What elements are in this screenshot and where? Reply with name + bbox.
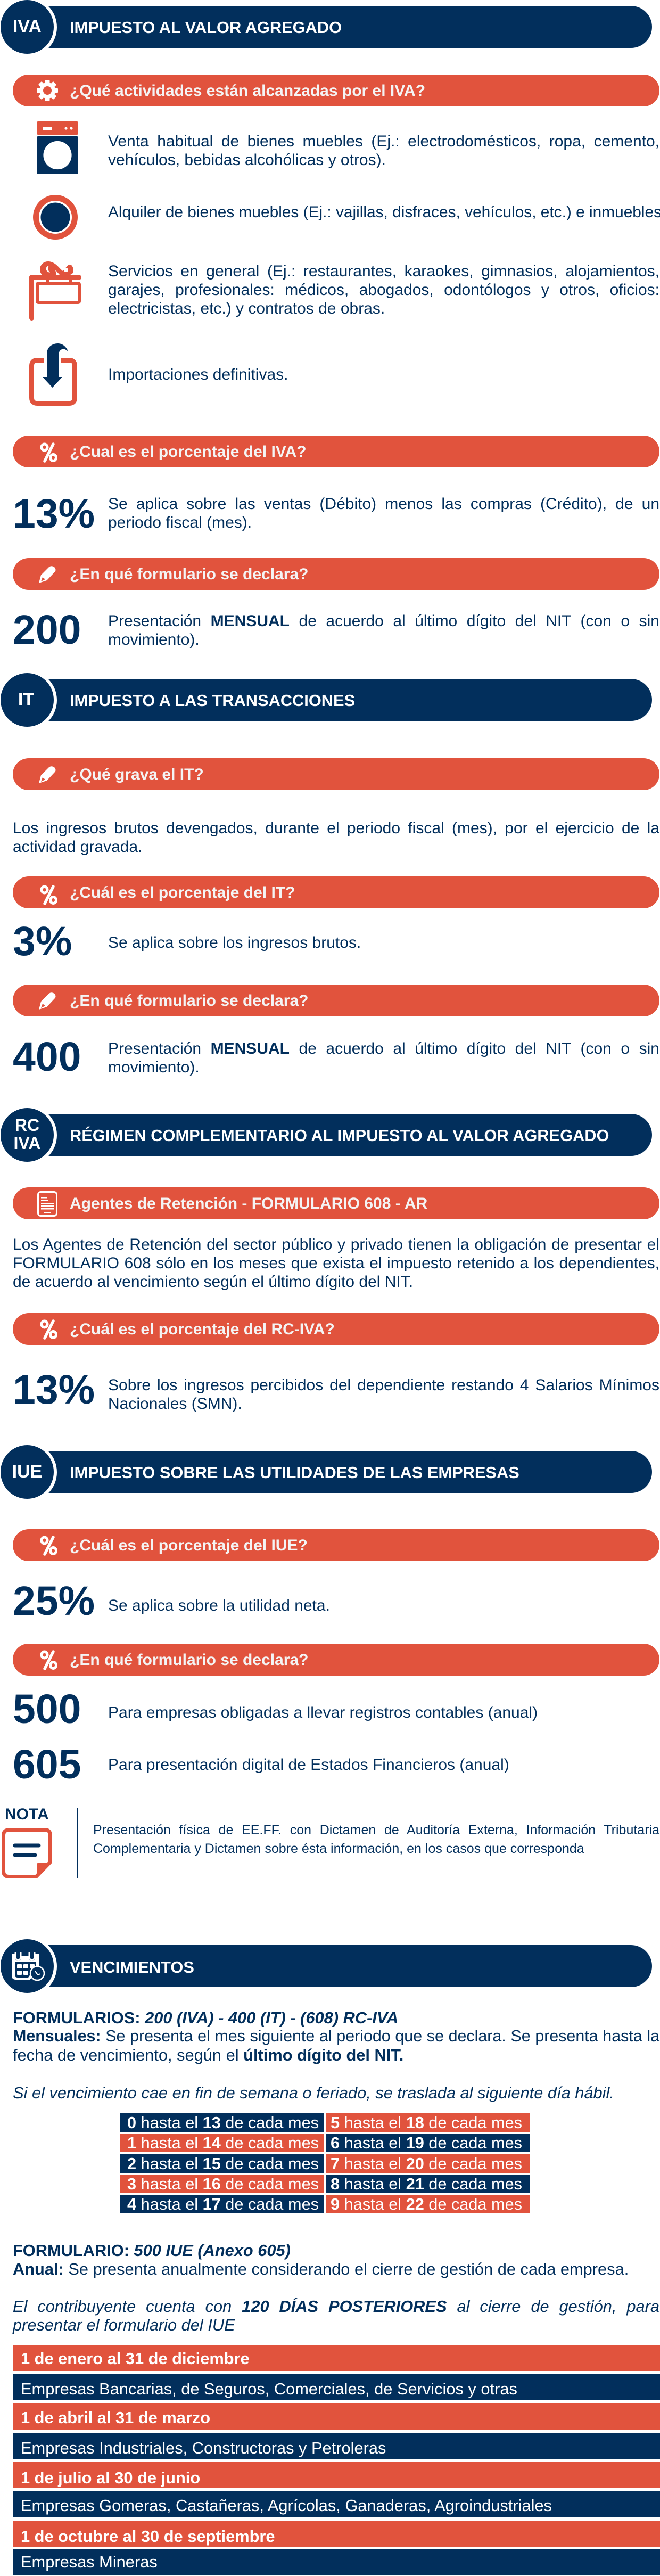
icon: import box with arrow (29, 343, 77, 406)
row 3 / 8 (120, 2175, 530, 2193)
icon: percent (40, 1536, 57, 1556)
text: formularios mensuales: FORMULARIOS: 200 (IVA) - 400 (IT) - (608) RC-IVA (13, 2008, 398, 2027)
subheader: que grava IT (13, 758, 659, 790)
text: nota: Presentación física de EE.FF. con Dictamen de Auditoría Externa, Información Tributaria (93, 1823, 659, 1837)
heading: Impuesto sobre utilidades: IMPUESTO SOBRE LAS UTILIDADES DE LAS EMPRESAS (70, 1463, 519, 1482)
icon: pencil (39, 992, 55, 1010)
number: 605: 605 (13, 1742, 81, 1787)
period 3 (13, 2462, 660, 2488)
subheader: porcentaje IUE (13, 1529, 659, 1561)
table: vencimiento por ultimo digito (120, 2113, 530, 2213)
label: formulario: ¿En qué formulario se declara? (70, 1651, 308, 1669)
number: 25%: 25% (13, 1578, 95, 1624)
text: agentes de retencion: de acuerdo al vencimiento según el último dígito del NIT. (13, 1273, 413, 1291)
label: que grava: ¿Qué grava el IT? (70, 766, 204, 783)
rows: cierre de gestion por sector (0, 2345, 660, 2576)
section header: IVA (1, 0, 652, 54)
period 3: 1 de julio al 30 de junio (21, 2468, 200, 2487)
row 4 / 9 (120, 2195, 530, 2213)
text: formularios mensuales (13, 2008, 660, 2064)
text: presentacion mensual: Presentación MENSUAL de acuerdo al último dígito del NIT (con o sin (108, 612, 659, 630)
row 1 / 6 (120, 2134, 530, 2152)
icon: document (37, 1191, 57, 1217)
period 4 (13, 2521, 660, 2547)
text: servicios: electricistas, etc.) y contratos de obras. (108, 300, 385, 317)
icon: percent (40, 885, 57, 905)
number: 3%: 3% (13, 918, 72, 964)
subheader: formulario IUE (13, 1644, 659, 1676)
section header: IUE (1, 1445, 652, 1499)
badge: IT: IT (18, 690, 34, 710)
label: porcentaje: ¿Cuál es el porcentaje del IT? (70, 884, 295, 901)
text: ingresos brutos (13, 819, 659, 856)
text: alquiler: Alquiler de bienes muebles (Ej.: vajillas, disfraces, vehículos, etc.) e inmuebles. (108, 203, 660, 221)
text: ingresos del dependiente (108, 1376, 659, 1413)
text: fin de semana: Si el vencimiento cae en fin de semana o feriado, se traslada al siguiente día hábil. (13, 2083, 614, 2102)
label: NOTA: NOTA (5, 1806, 49, 1823)
badge: IT (1, 673, 54, 727)
divider line (77, 1808, 78, 1878)
row 3 / 8: 8 hasta el 21 de cada mes (331, 2175, 522, 2193)
text: presentacion mensual: movimiento). (108, 1059, 200, 1076)
text: ventas menos compras (108, 495, 659, 531)
badge: IVA: IVA (13, 17, 42, 37)
text: ingresos del dependiente: Nacionales (SMN). (108, 1395, 242, 1413)
row 2 / 7: 7 hasta el 20 de cada mes (331, 2154, 522, 2173)
row 0 / 5 (120, 2113, 530, 2132)
icon: gear (37, 80, 58, 101)
sector 2 (13, 2433, 660, 2459)
icon: pencil (39, 766, 55, 783)
text: utilidad neta: Se aplica sobre la utilidad neta. (108, 1597, 330, 1614)
text: 120 dias: El contribuyente cuenta con 120 DÍAS POSTERIORES al cierre de gestión, para (13, 2297, 659, 2316)
subheader: porcentaje IT (13, 876, 659, 908)
period 2 (13, 2403, 660, 2430)
heading: Impuesto al valor agregado: IMPUESTO AL VALOR AGREGADO (70, 18, 342, 37)
section header: IT (1, 673, 652, 727)
row 4 / 9: 4 hasta el 17 de cada mes (127, 2195, 319, 2213)
text: ingresos brutos: actividad gravada. (13, 838, 143, 856)
text: formulario 500: Anual: Se presenta anualmente considerando el cierre de gestión de cada empresa. (13, 2260, 629, 2278)
row 2 / 7 (120, 2154, 530, 2173)
heading: Vencimientos: VENCIMIENTOS (70, 1958, 194, 1976)
sector 1 (13, 2374, 660, 2400)
row 0 / 5: 0 hasta el 13 de cada mes (127, 2113, 319, 2132)
number: 13%: 13% (13, 491, 95, 537)
text: ventas menos compras: Se aplica sobre las ventas (Débito) menos las compras (Crédito), de un (108, 495, 659, 513)
sector 4: Empresas Mineras (21, 2553, 158, 2571)
number: 500: 500 (13, 1686, 81, 1732)
subheader: agentes de retencion (13, 1187, 659, 1219)
row 1 / 6: 1 hasta el 14 de cada mes (127, 2134, 319, 2152)
label: porcentaje: ¿Cuál es el porcentaje del IUE? (70, 1537, 308, 1554)
row 4 / 9: 9 hasta el 22 de cada mes (331, 2195, 522, 2213)
text: formulario 500 (13, 2241, 659, 2278)
label: formulario: ¿En qué formulario se declara? (70, 565, 308, 583)
text: presentacion mensual (108, 612, 659, 649)
icon: pencil (39, 566, 55, 583)
row 3 / 8: 3 hasta el 16 de cada mes (127, 2175, 319, 2193)
icon: sticky note (2, 1828, 52, 1878)
text: 120 dias: presentar el formulario del IUE (13, 2316, 235, 2334)
sector 4 (13, 2549, 660, 2575)
text: servicios (108, 262, 659, 317)
text: form 605: Para presentación digital de Estados Financieros (anual) (108, 1756, 509, 1774)
badge: IUE (1, 1445, 54, 1499)
text: formularios mensuales: fecha de vencimiento, según el último dígito del NIT. (13, 2046, 403, 2064)
label: formulario: ¿En qué formulario se declara? (70, 992, 308, 1010)
text: presentacion mensual: Presentación MENSUAL de acuerdo al último dígito del NIT (con o sin (108, 1040, 659, 1057)
number: 13%: 13% (13, 1367, 95, 1413)
sector 1: Empresas Bancarias, de Seguros, Comerciales, de Servicios y otras (21, 2380, 517, 2398)
period 2: 1 de abril al 31 de marzo (21, 2408, 210, 2427)
period 4: 1 de octubre al 30 de septiembre (21, 2527, 275, 2546)
text: nota: Complementaria y Dictamen sobre ésta información, en los casos que corresponda (93, 1841, 584, 1856)
badge: RC IVA: IVA (14, 1134, 40, 1153)
text: agentes de retencion (13, 1236, 659, 1291)
section header: RC-IVA (1, 1108, 652, 1162)
sector 2: Empresas Industriales, Constructoras y Petroleras (21, 2439, 386, 2457)
icon: calendar with clock (12, 1952, 45, 1981)
heading: Impuesto a las transacciones: IMPUESTO A LAS TRANSACCIONES (70, 691, 355, 710)
text: ingresos brutos: Se aplica sobre los ingresos brutos. (108, 934, 361, 951)
row 2 / 7: 2 hasta el 15 de cada mes (127, 2154, 319, 2173)
icon: percent (40, 1650, 57, 1670)
text: 120 dias (13, 2297, 659, 2334)
sector 3 (13, 2491, 660, 2517)
badge: RC IVA (1, 1108, 54, 1162)
badge: IVA (1, 0, 54, 54)
text: form 500: Para empresas obligadas a llevar registros contables (anual) (108, 1704, 538, 1721)
text: formularios mensuales: Mensuales: Se presenta el mes siguiente al periodo que se declara. Se presenta hasta la (13, 2027, 659, 2045)
text: agentes de retencion: FORMULARIO 608 sólo en los meses que exista el impuesto retenido a los dependientes, (13, 1254, 659, 1272)
icon: percent (40, 442, 57, 463)
row 1 / 6: 6 hasta el 19 de cada mes (331, 2134, 522, 2152)
label: actividades: ¿Qué actividades están alcanzadas por el IVA? (70, 82, 425, 100)
subheader: actividades alcanzadas (13, 75, 659, 106)
text: ingresos brutos: Los ingresos brutos devengados, durante el periodo fiscal (mes), por el ejercicio de la (13, 819, 659, 837)
label: agentes: Agentes de Retención - FORMULARIO 608 - AR (70, 1195, 427, 1212)
text: venta habitual (108, 133, 659, 169)
text: formulario 500: FORMULARIO: 500 IUE (Anexo 605) (13, 2241, 291, 2260)
number: 200: 200 (13, 607, 81, 653)
text: presentacion mensual: movimiento). (108, 631, 200, 649)
subheader: porcentaje IVA (13, 436, 659, 467)
period 1 (13, 2345, 660, 2371)
period 1: 1 de enero al 31 de diciembre (21, 2349, 250, 2368)
label: porcentaje: ¿Cual es el porcentaje del IVA? (70, 443, 307, 461)
icon: washing machine (37, 121, 78, 174)
text: servicios: garajes, profesionales: médicos, abogados, odontólogos y otros, oficios: (108, 281, 659, 299)
row 0 / 5: 5 hasta el 18 de cada mes (331, 2113, 522, 2132)
text: importaciones: Importaciones definitivas. (108, 366, 288, 383)
number: 400: 400 (13, 1034, 81, 1080)
icon: plate (33, 195, 78, 240)
text: venta habitual: vehículos, bebidas alcohólicas y otros). (108, 151, 386, 169)
text: presentacion mensual (108, 1040, 659, 1076)
icon: percent (40, 1319, 57, 1340)
text: ingresos del dependiente: Sobre los ingresos percibidos del dependiente restando 4 Salarios Mínimos (108, 1376, 659, 1394)
text: nota (93, 1823, 660, 1856)
subheader: porcentaje RC-IVA (13, 1313, 659, 1345)
heading: Regimen complementario: RÉGIMEN COMPLEMENTARIO AL IMPUESTO AL VALOR AGREGADO (70, 1126, 609, 1145)
subheader: formulario IVA (13, 558, 659, 590)
subheader: formulario IT (13, 985, 659, 1016)
section header: Vencimientos (1, 1939, 652, 1993)
badge: RC IVA: RC (15, 1115, 39, 1135)
text: servicios: Servicios en general (Ej.: restaurantes, karaokes, gimnasios, alojamientos, (108, 262, 659, 280)
icon: hanging sign (29, 261, 81, 321)
sector 3: Empresas Gomeras, Castañeras, Agrícolas, Ganaderas, Agroindustriales (21, 2496, 552, 2515)
label: porcentaje: ¿Cuál es el porcentaje del RC-IVA? (70, 1320, 335, 1338)
text: venta habitual: Venta habitual de bienes muebles (Ej.: electrodomésticos, ropa, cemento, (108, 133, 659, 150)
text: ventas menos compras: periodo fiscal (mes). (108, 514, 252, 531)
badge: IUE: IUE (12, 1462, 42, 1482)
text: agentes de retencion: Los Agentes de Retención del sector público y privado tienen la obligación de presentar el (13, 1236, 659, 1253)
